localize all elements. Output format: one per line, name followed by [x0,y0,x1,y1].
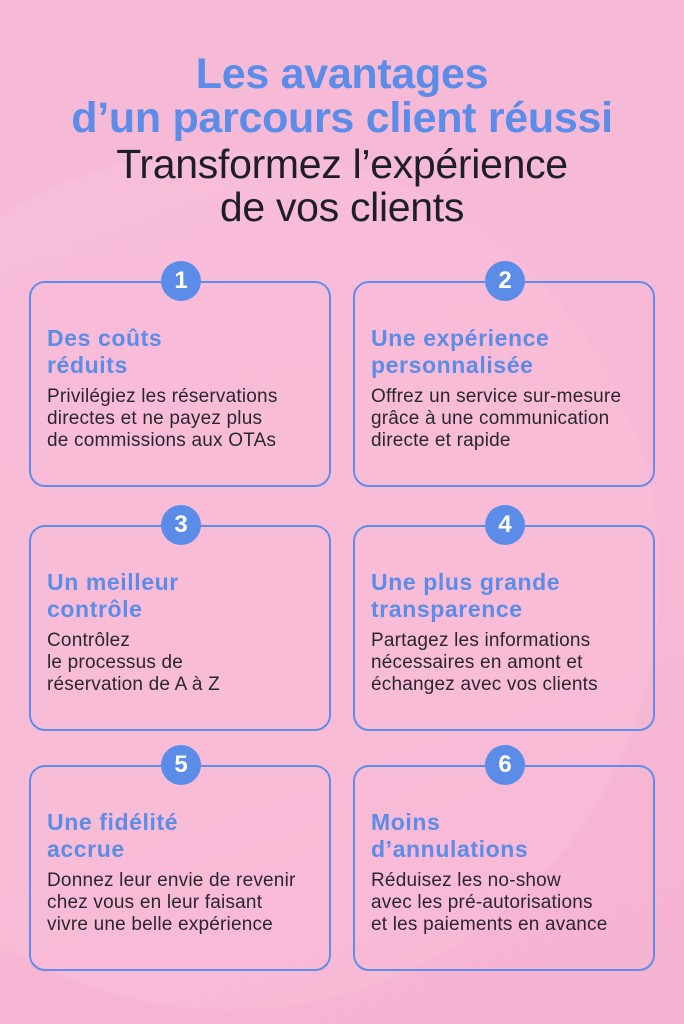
heading 2: Une expérience [371,325,549,351]
number 4: 4 [498,511,512,538]
panel: 4 [353,525,655,731]
text 2: directe et rapide [371,430,511,451]
number 1: 1 [174,267,188,294]
text 2: Offrez un service sur-mesure [371,386,621,407]
text 3: le processus de [47,652,183,673]
heading 4: Une plus grande [371,569,560,595]
text 5: chez vous en leur faisant [47,892,262,913]
panel: 6 [353,765,655,971]
text 4: échangez avec vos clients [371,674,598,695]
text 6: avec les pré-autorisations [371,892,593,913]
heading 2: personnalisée [371,352,533,378]
panel: 5 [29,765,331,971]
panel: 3 [29,525,331,731]
number 6 [485,745,525,785]
heading 1: Des coûts [47,325,162,351]
subtitle [116,141,568,230]
text 1 [47,386,278,451]
text 4 [371,630,598,695]
heading 4 [371,569,560,622]
panel: 2 [353,281,655,487]
text 3: Contrôlez [47,630,130,651]
number 5: 5 [174,751,188,778]
heading 4: transparence [371,596,523,622]
text 6: Réduisez les no-show [371,870,561,891]
text 1: de commissions aux OTAs [47,430,276,451]
text 6 [371,870,608,935]
text 4: nécessaires en amont et [371,652,583,673]
subtitle: de vos clients [220,184,464,230]
number 1 [161,261,201,301]
number 4 [485,505,525,545]
subtitle: Transformez l’expérience [116,141,568,187]
text 3 [47,630,220,695]
heading 6: Moins [371,809,440,835]
number 5 [161,745,201,785]
text 5 [47,870,296,935]
text 6: et les paiements en avance [371,914,608,935]
heading 3: contrôle [47,596,143,622]
text 3: réservation de A à Z [47,674,220,695]
heading 1: réduits [47,352,128,378]
heading 2 [371,325,549,378]
text 5: Donnez leur envie de revenir [47,870,296,891]
heading 3 [47,569,179,622]
text 2: grâce à une communication [371,408,609,429]
heading 1 [47,325,162,378]
number 3: 3 [174,511,188,538]
number 2: 2 [498,267,512,294]
text 2 [371,386,621,451]
title: Les avantages [196,50,488,98]
number 2 [485,261,525,301]
title: d’un parcours client réussi [71,94,613,142]
heading 5: accrue [47,836,125,862]
heading 6: d’annulations [371,836,528,862]
number 6: 6 [498,751,512,778]
heading 5 [47,809,178,862]
heading 6 [371,809,528,862]
panel: 1 [29,281,331,487]
title [71,50,613,142]
text 1: Privilégiez les réservations [47,386,278,407]
text 1: directes et ne payez plus [47,408,262,429]
heading 3: Un meilleur [47,569,179,595]
text 5: vivre une belle expérience [47,914,273,935]
text 4: Partagez les informations [371,630,590,651]
heading 5: Une fidélité [47,809,178,835]
number 3 [161,505,201,545]
